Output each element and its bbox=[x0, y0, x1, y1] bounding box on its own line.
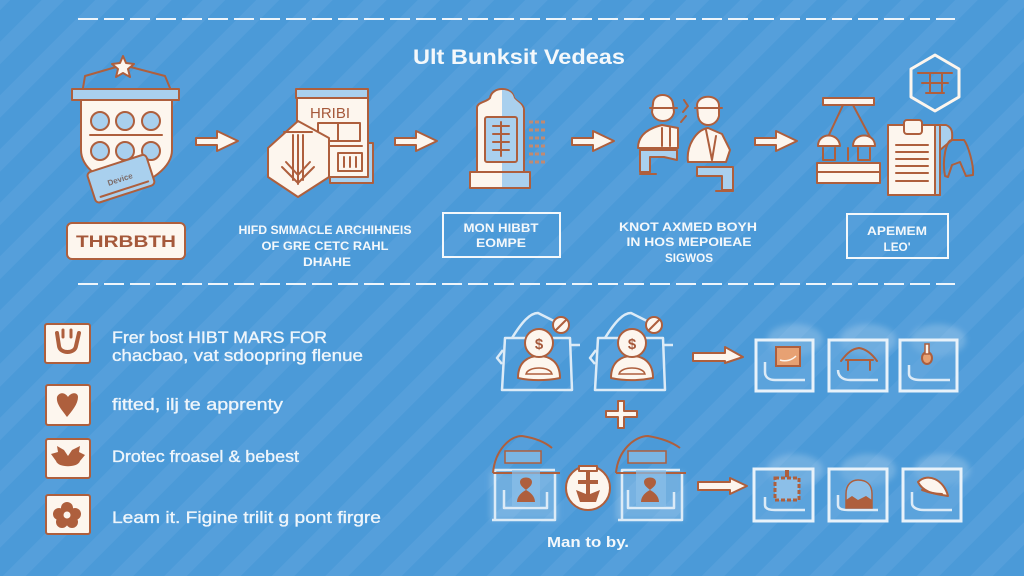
arrow: top row bbox=[693, 347, 743, 363]
list item: flower icon and text: Leam it. Figine trilit g pont firgre bbox=[112, 508, 381, 527]
arrow: step two to three bbox=[395, 131, 437, 151]
label: step two: DHAHE bbox=[303, 255, 351, 269]
icon: hanging lamps and document bbox=[817, 55, 973, 195]
icon: money house one bbox=[497, 313, 580, 390]
icon: shield with star and card bbox=[72, 56, 179, 203]
list item: hand icon and text: chacbao, vat sdoopring flenue bbox=[112, 346, 363, 365]
icon: bottle bbox=[470, 89, 545, 188]
label: step five: APEMEM bbox=[867, 224, 927, 238]
label: step five bbox=[847, 214, 948, 258]
list item: heart icon and text: fitted, ilj te apprenty bbox=[112, 395, 284, 414]
title: Ult Bunksit Vedeas bbox=[413, 46, 625, 69]
arrow: step four to five bbox=[755, 131, 797, 151]
arrow: step one to two bbox=[196, 131, 238, 151]
icon: shield with star and card: Device bbox=[106, 171, 134, 188]
result icons: top row bbox=[756, 324, 966, 391]
icon: two workers bbox=[638, 95, 733, 191]
label: step three: MON HIBBT bbox=[464, 221, 539, 235]
icon: building with badge bbox=[268, 89, 373, 197]
label: step four bbox=[619, 220, 757, 265]
label: step one: THRBBTH bbox=[76, 232, 176, 251]
label: step two: OF GRE CETC RAHL bbox=[262, 239, 388, 253]
label: step four: KNOT AXMED BOYH bbox=[619, 220, 757, 234]
caption: Man to by. bbox=[547, 534, 629, 551]
list item: flower icon and text bbox=[46, 495, 381, 534]
arrow: bottom row bbox=[698, 478, 747, 494]
icon: bank house two bbox=[616, 436, 686, 520]
label: step four: IN HOS MEPOIEAE bbox=[626, 235, 752, 249]
icon: anchor coin bbox=[566, 466, 610, 510]
label: step five: LEO' bbox=[884, 240, 911, 254]
icon: plus sign bbox=[606, 401, 637, 428]
list item: leaf crown icon and text: Drotec froasel & bebest bbox=[112, 447, 299, 466]
label: step three: EOMPE bbox=[476, 236, 526, 250]
list item: hand icon and text: Frer bost HIBT MARS FOR bbox=[112, 328, 327, 347]
list item: hand icon and text bbox=[45, 324, 363, 365]
list item: heart icon and text bbox=[46, 385, 284, 425]
label: step four: SIGWOS bbox=[665, 251, 713, 265]
icon: money house two: $ bbox=[628, 336, 637, 353]
list item: leaf crown icon and text bbox=[46, 439, 299, 478]
icon: money house one: $ bbox=[535, 336, 544, 353]
result icons: bottom row bbox=[754, 454, 970, 521]
icon: money house two bbox=[590, 313, 673, 390]
arrow: step three to four bbox=[572, 131, 614, 151]
icon: building with badge: HRIBI bbox=[310, 105, 350, 122]
icon: bank house one bbox=[490, 436, 560, 520]
label: step two: HIFD SMMACLE ARCHIHNEIS bbox=[238, 223, 412, 237]
label: step one bbox=[67, 223, 185, 259]
label: step two bbox=[238, 223, 412, 269]
label: step three bbox=[443, 213, 560, 257]
